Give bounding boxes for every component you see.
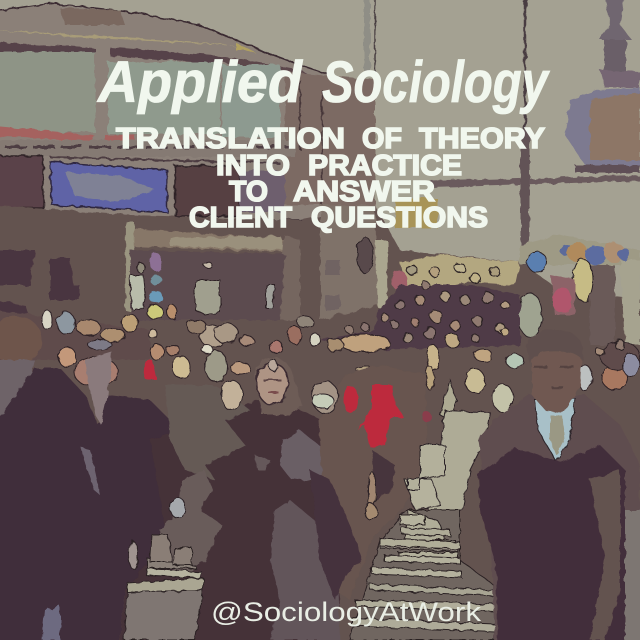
subtitle: translation of theory into practice to answer client questions: INTO (216, 150, 290, 182)
background: dark left window (0, 156, 43, 208)
subtitle: translation of theory into practice to answer client questions: TO (229, 176, 268, 208)
suit shoulders (478, 395, 640, 640)
title: Sociology (322, 50, 550, 115)
person: far-left face (0, 316, 42, 364)
background: dark window (175, 166, 240, 216)
background: trellis upper right (600, 0, 632, 40)
person: left man dark coat (0, 368, 178, 640)
subtitle: translation of theory into practice to answer client questions: TRANSLATION (116, 123, 345, 155)
building: curved roof (0, 3, 340, 220)
person: centre figure in brown (310, 365, 428, 600)
background: blue shop sign (50, 162, 167, 212)
crowd: dark band (320, 285, 520, 350)
crowd: dark blotches (0, 250, 80, 345)
subtitle: translation of theory into practice to answer client questions: PRACTICE (308, 150, 462, 182)
pale bag (170, 498, 186, 518)
crowd: upper yellow band (400, 255, 520, 290)
title (96, 50, 550, 115)
building: red strip (0, 126, 95, 141)
crosswalk: central stripes (350, 510, 495, 640)
person: centre walker pale coat (405, 380, 490, 515)
eyes and mouth (534, 367, 574, 388)
hair (527, 330, 583, 365)
crowd: small heads (42, 305, 640, 412)
background: yellow sign (395, 198, 437, 228)
crowd: brown mass (0, 205, 640, 640)
background: upper street buildings (0, 0, 640, 310)
coat grey patches (165, 385, 250, 480)
neck and face (532, 350, 582, 412)
person: grey scarf (85, 352, 112, 425)
right edge patch (625, 510, 640, 640)
subtitle: translation of theory into practice to answer client questions: QUESTIONS (311, 202, 488, 234)
person: coat sleeve highlight (80, 446, 100, 495)
person: left side grey coat (0, 360, 35, 430)
pale sleeve (368, 472, 376, 508)
crowd: poles and hanging items (357, 237, 373, 273)
person: woman in black (118, 357, 340, 640)
hair: woman (255, 357, 302, 415)
title: Applied (96, 50, 303, 115)
building: brown facade (285, 72, 375, 205)
dark suit front (478, 445, 625, 640)
background: right wall lines (430, 178, 640, 184)
face: woman (257, 363, 288, 405)
subtitle: translation of theory into practice to answer client questions: OF (362, 123, 402, 155)
subtitle: translation of theory into practice to answer client questions (116, 123, 545, 234)
shirt and tie (535, 398, 575, 461)
subtitle: translation of theory into practice to answer client questions: CLIENT (189, 202, 292, 234)
subtitle: translation of theory into practice to answer client questions: ANSWER (293, 176, 435, 208)
social handle: @SociologyAtWork (211, 597, 482, 627)
person: right man in suit (478, 330, 640, 640)
building: dark window bands (0, 42, 220, 64)
person: lower-left pale bag and hem (42, 605, 60, 640)
face mask (312, 381, 338, 413)
crowd: tiny far heads (346, 263, 625, 356)
crowd: right pole and balloons (590, 265, 615, 345)
crosswalk: lower left (124, 535, 203, 640)
building: sage windows (0, 52, 95, 132)
background: right awning (565, 88, 640, 165)
face: companion (221, 380, 243, 410)
red coat figure (145, 360, 432, 447)
subtitle: translation of theory into practice to answer client questions: THEORY (419, 123, 545, 155)
crowd: left hanging bags (130, 253, 275, 315)
